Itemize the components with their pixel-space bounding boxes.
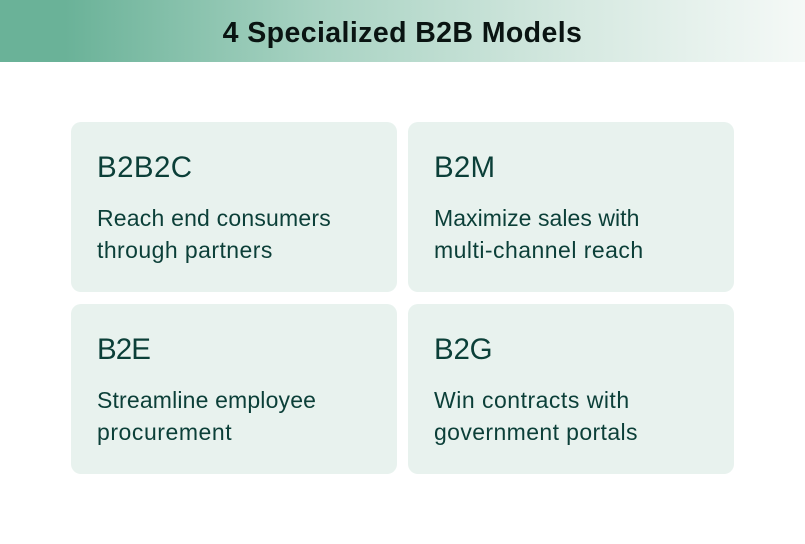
text: B2M description: multi-channel reach bbox=[434, 237, 644, 263]
title banner bbox=[0, 0, 805, 62]
text: B2B2C description bbox=[97, 205, 331, 263]
text: B2E description: Streamline employee bbox=[97, 387, 316, 413]
heading: B2E: B2E bbox=[97, 333, 150, 366]
panel: B2E bbox=[71, 304, 397, 474]
text: B2M description bbox=[434, 205, 644, 263]
panel: B2G bbox=[408, 304, 734, 474]
panel: B2B2C bbox=[71, 122, 397, 292]
text: B2B2C description: through partners bbox=[97, 237, 273, 263]
heading: B2B2C: B2B2C bbox=[97, 151, 192, 184]
text: B2E description: procurement bbox=[97, 419, 232, 445]
heading: B2M: B2M bbox=[434, 151, 495, 184]
title: 4 Specialized B2B Models bbox=[223, 17, 582, 49]
text: B2G description: Win contracts with bbox=[434, 387, 630, 413]
heading: B2G: B2G bbox=[434, 333, 492, 366]
text: B2G description: government portals bbox=[434, 419, 638, 445]
text: B2G description bbox=[434, 387, 638, 445]
text: B2E description bbox=[97, 387, 316, 445]
text: B2M description: Maximize sales with bbox=[434, 205, 639, 231]
text: B2B2C description: Reach end consumers bbox=[97, 205, 331, 231]
panel: B2M bbox=[408, 122, 734, 292]
